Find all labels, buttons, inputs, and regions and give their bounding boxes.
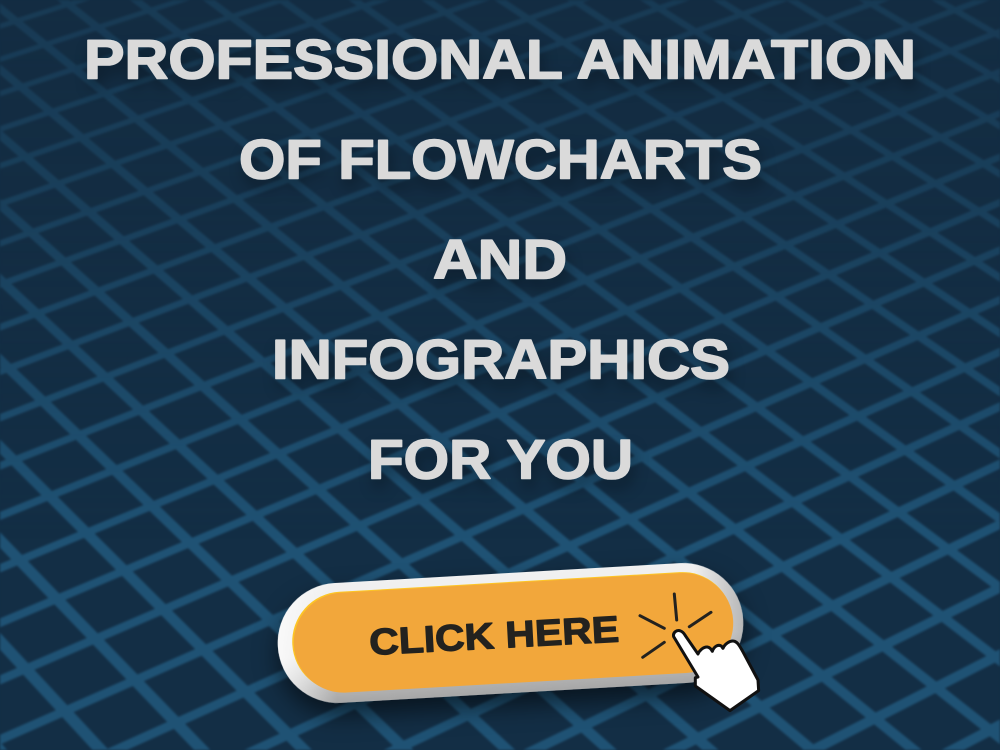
button label: CLICK HERE <box>368 609 620 663</box>
button highlight edge <box>289 569 735 694</box>
click here button <box>274 560 747 706</box>
title line 4: INFOGRAPHICS <box>272 328 730 390</box>
title <box>84 28 916 490</box>
button rim <box>274 560 747 706</box>
button face <box>291 570 736 695</box>
title line 2: OF FLOWCHARTS <box>239 128 762 190</box>
icon: click rays <box>640 594 711 657</box>
icon: pointing hand <box>674 631 759 711</box>
title line 1: PROFESSIONAL ANIMATION <box>84 28 916 90</box>
title line 5: FOR YOU <box>368 428 633 490</box>
button rim side shading <box>274 560 747 706</box>
title line 3: AND <box>433 228 567 290</box>
